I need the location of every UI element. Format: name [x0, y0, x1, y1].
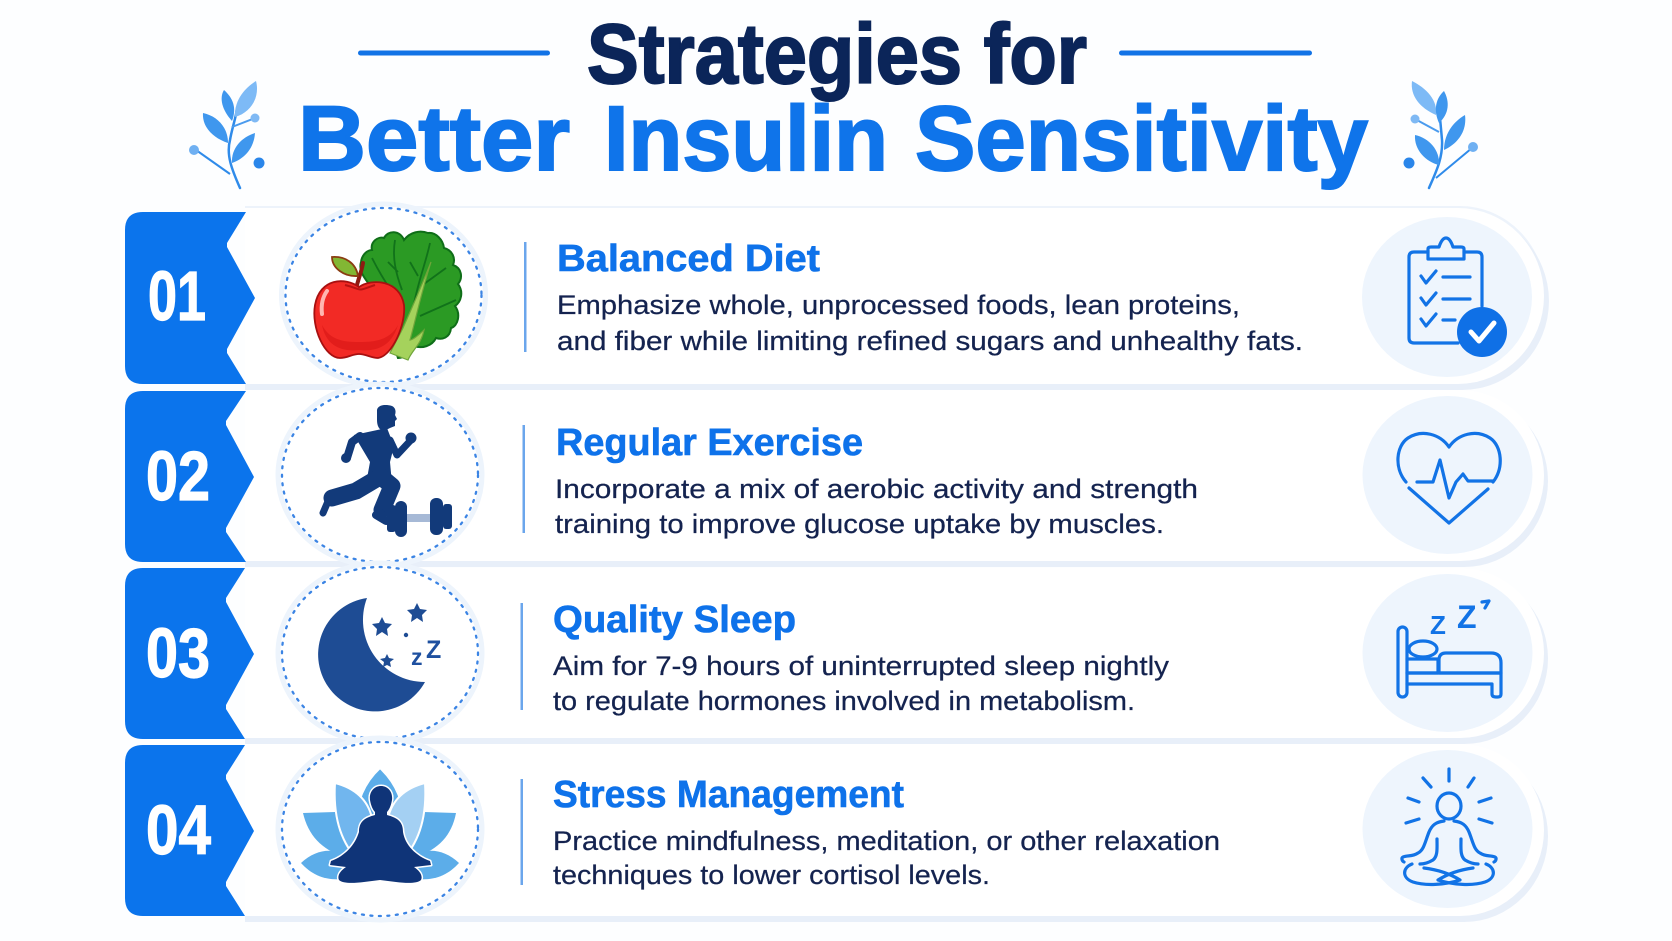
icon circle: checklist	[1362, 217, 1532, 377]
title line 2	[298, 88, 1368, 190]
number badge 03	[125, 568, 254, 739]
icon: crescent moon and stars	[318, 598, 441, 711]
body text: Aim for 7-9 hours of uninterrupted sleep nightly	[553, 651, 1170, 681]
divider	[520, 779, 523, 885]
number badge 01: 01	[148, 257, 206, 335]
number badge 01	[125, 212, 255, 384]
body text: Emphasize whole, unprocessed foods, lean proteins,	[557, 290, 1240, 320]
dotted circle	[278, 563, 482, 743]
title line 2: Insulin	[604, 88, 888, 190]
heading: Balanced Diet	[557, 238, 820, 280]
panel: 02 regular exercise	[125, 384, 1550, 567]
divider	[520, 603, 523, 710]
body text	[555, 474, 1198, 539]
card backgrounds	[245, 206, 1549, 922]
heading: Regular Exercise	[556, 422, 863, 464]
body text	[553, 826, 1220, 890]
panel: 03 quality sleep	[125, 563, 1550, 744]
body text	[557, 290, 1303, 356]
number badge 02	[125, 391, 254, 562]
heading: Stress Management	[553, 774, 904, 816]
icon: left laurel sprig	[189, 81, 264, 188]
title line 1: Strategies for	[587, 7, 1087, 101]
panel: 01 balanced diet	[125, 204, 1550, 388]
icon circle: bed with zzz: Z	[1457, 599, 1477, 635]
icon: crescent moon and stars: z	[411, 644, 422, 670]
title line 2: Sensitivity	[915, 88, 1368, 190]
dotted circle	[278, 738, 482, 920]
icon circle: bed with zzz: Z	[1430, 610, 1446, 640]
right title rule	[1119, 50, 1312, 56]
icon: crescent moon and stars: Z	[426, 636, 441, 664]
dotted circle	[278, 384, 482, 566]
body text: Practice mindfulness, meditation, or other relaxation	[553, 826, 1220, 856]
left title rule	[358, 50, 550, 56]
number badge 04	[125, 745, 254, 916]
icon: apple and leafy greens	[314, 232, 461, 360]
body text: to regulate hormones involved in metabolism.	[553, 686, 1135, 716]
body text: training to improve glucose uptake by muscles.	[555, 509, 1164, 539]
divider	[522, 425, 525, 533]
panel: 04 stress management	[125, 738, 1550, 922]
dotted circle	[282, 204, 486, 386]
number badge 02: 02	[146, 437, 210, 515]
heading: Quality Sleep	[553, 599, 796, 641]
icon circle: heart with pulse	[1362, 396, 1532, 554]
body text: Incorporate a mix of aerobic activity and strength	[555, 474, 1198, 504]
divider	[524, 242, 526, 352]
icon circle: meditating outline	[1362, 750, 1532, 908]
icon circle: bed with zzz	[1362, 574, 1532, 732]
header	[189, 7, 1478, 190]
body text: and fiber while limiting refined sugars and unhealthy fats.	[557, 326, 1303, 356]
body text: techniques to lower cortisol levels.	[553, 860, 990, 890]
body text	[553, 651, 1170, 716]
icon: runner with dumbbell	[323, 405, 452, 537]
number badge 03: 03	[146, 614, 210, 692]
number badge 04: 04	[146, 791, 211, 869]
icon: right laurel sprig	[1404, 81, 1478, 188]
title line 2: Better	[298, 88, 570, 190]
icon: lotus with meditating figure	[301, 768, 459, 883]
